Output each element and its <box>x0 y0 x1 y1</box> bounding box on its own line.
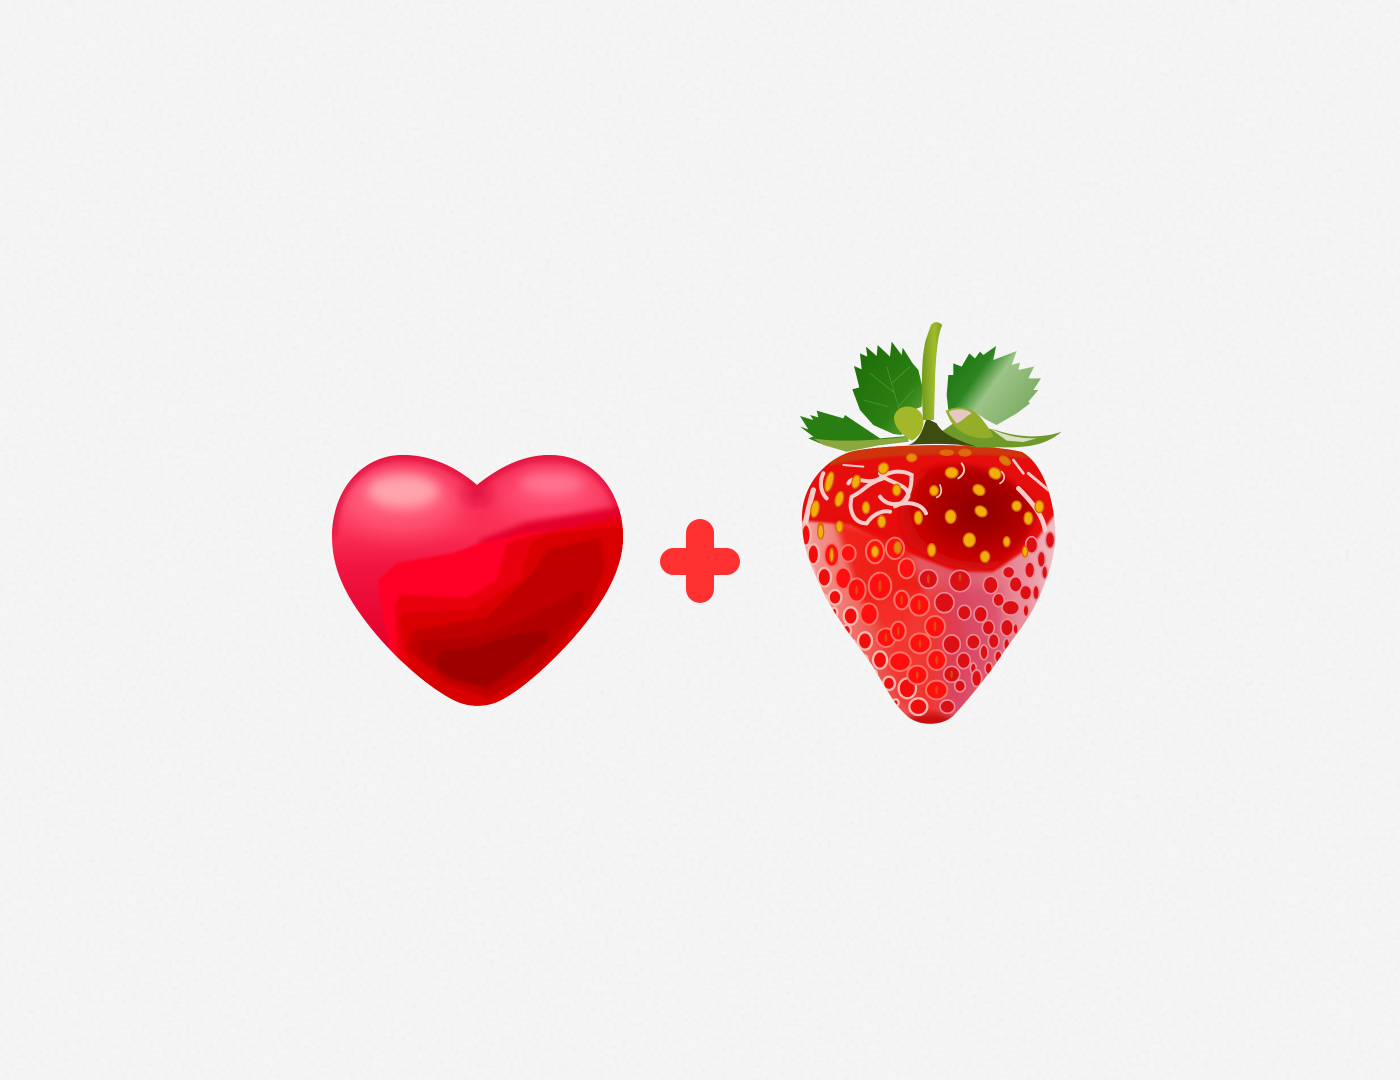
infographic: heart plus strawberry <box>332 322 1062 724</box>
right sepal <box>937 423 1062 447</box>
right leaf <box>947 346 1041 425</box>
crimson upper right band <box>478 505 623 561</box>
left bulb <box>894 406 923 441</box>
icon: glossy red heart <box>325 450 630 712</box>
dark band <box>420 588 585 690</box>
notch shade <box>463 484 491 504</box>
red band <box>395 515 630 705</box>
upper red flesh <box>795 440 1065 572</box>
stem and calyx <box>800 322 1062 452</box>
calyx base <box>908 418 977 447</box>
left highlight <box>367 474 439 508</box>
bright red band <box>378 525 630 700</box>
right sepal pale tip <box>990 428 1037 442</box>
lower left sepal <box>800 411 908 452</box>
dim seed slits <box>855 573 961 695</box>
right pits <box>919 532 1055 713</box>
darkest core <box>437 630 548 687</box>
right bulb highlight <box>948 409 972 423</box>
crimson band <box>400 525 630 710</box>
left red patch <box>835 520 925 640</box>
top shadow <box>829 445 1032 466</box>
left soft glow <box>338 468 462 532</box>
right highlight <box>520 472 584 496</box>
central lower rose <box>870 590 965 725</box>
upper glaze lines and seeds <box>805 449 1048 530</box>
right soft glow <box>494 469 610 521</box>
right bulb <box>946 408 993 438</box>
dark red shade <box>900 464 1036 570</box>
yellow seeds <box>818 521 1028 562</box>
illustration: strawberry <box>795 322 1065 731</box>
sepal pale edge <box>813 437 908 452</box>
top rim shade <box>332 455 623 537</box>
deep red band <box>408 538 605 698</box>
tip shade <box>906 710 954 724</box>
lower right rose tint <box>935 585 1005 715</box>
left leaf veins <box>863 367 913 423</box>
left leaf <box>852 342 922 435</box>
icon: plus sign <box>660 519 740 603</box>
strawberry body <box>795 440 1065 731</box>
outer pits <box>801 524 927 715</box>
stem <box>922 322 942 420</box>
lower pits and seeds <box>801 521 1055 715</box>
central pits <box>824 538 947 699</box>
